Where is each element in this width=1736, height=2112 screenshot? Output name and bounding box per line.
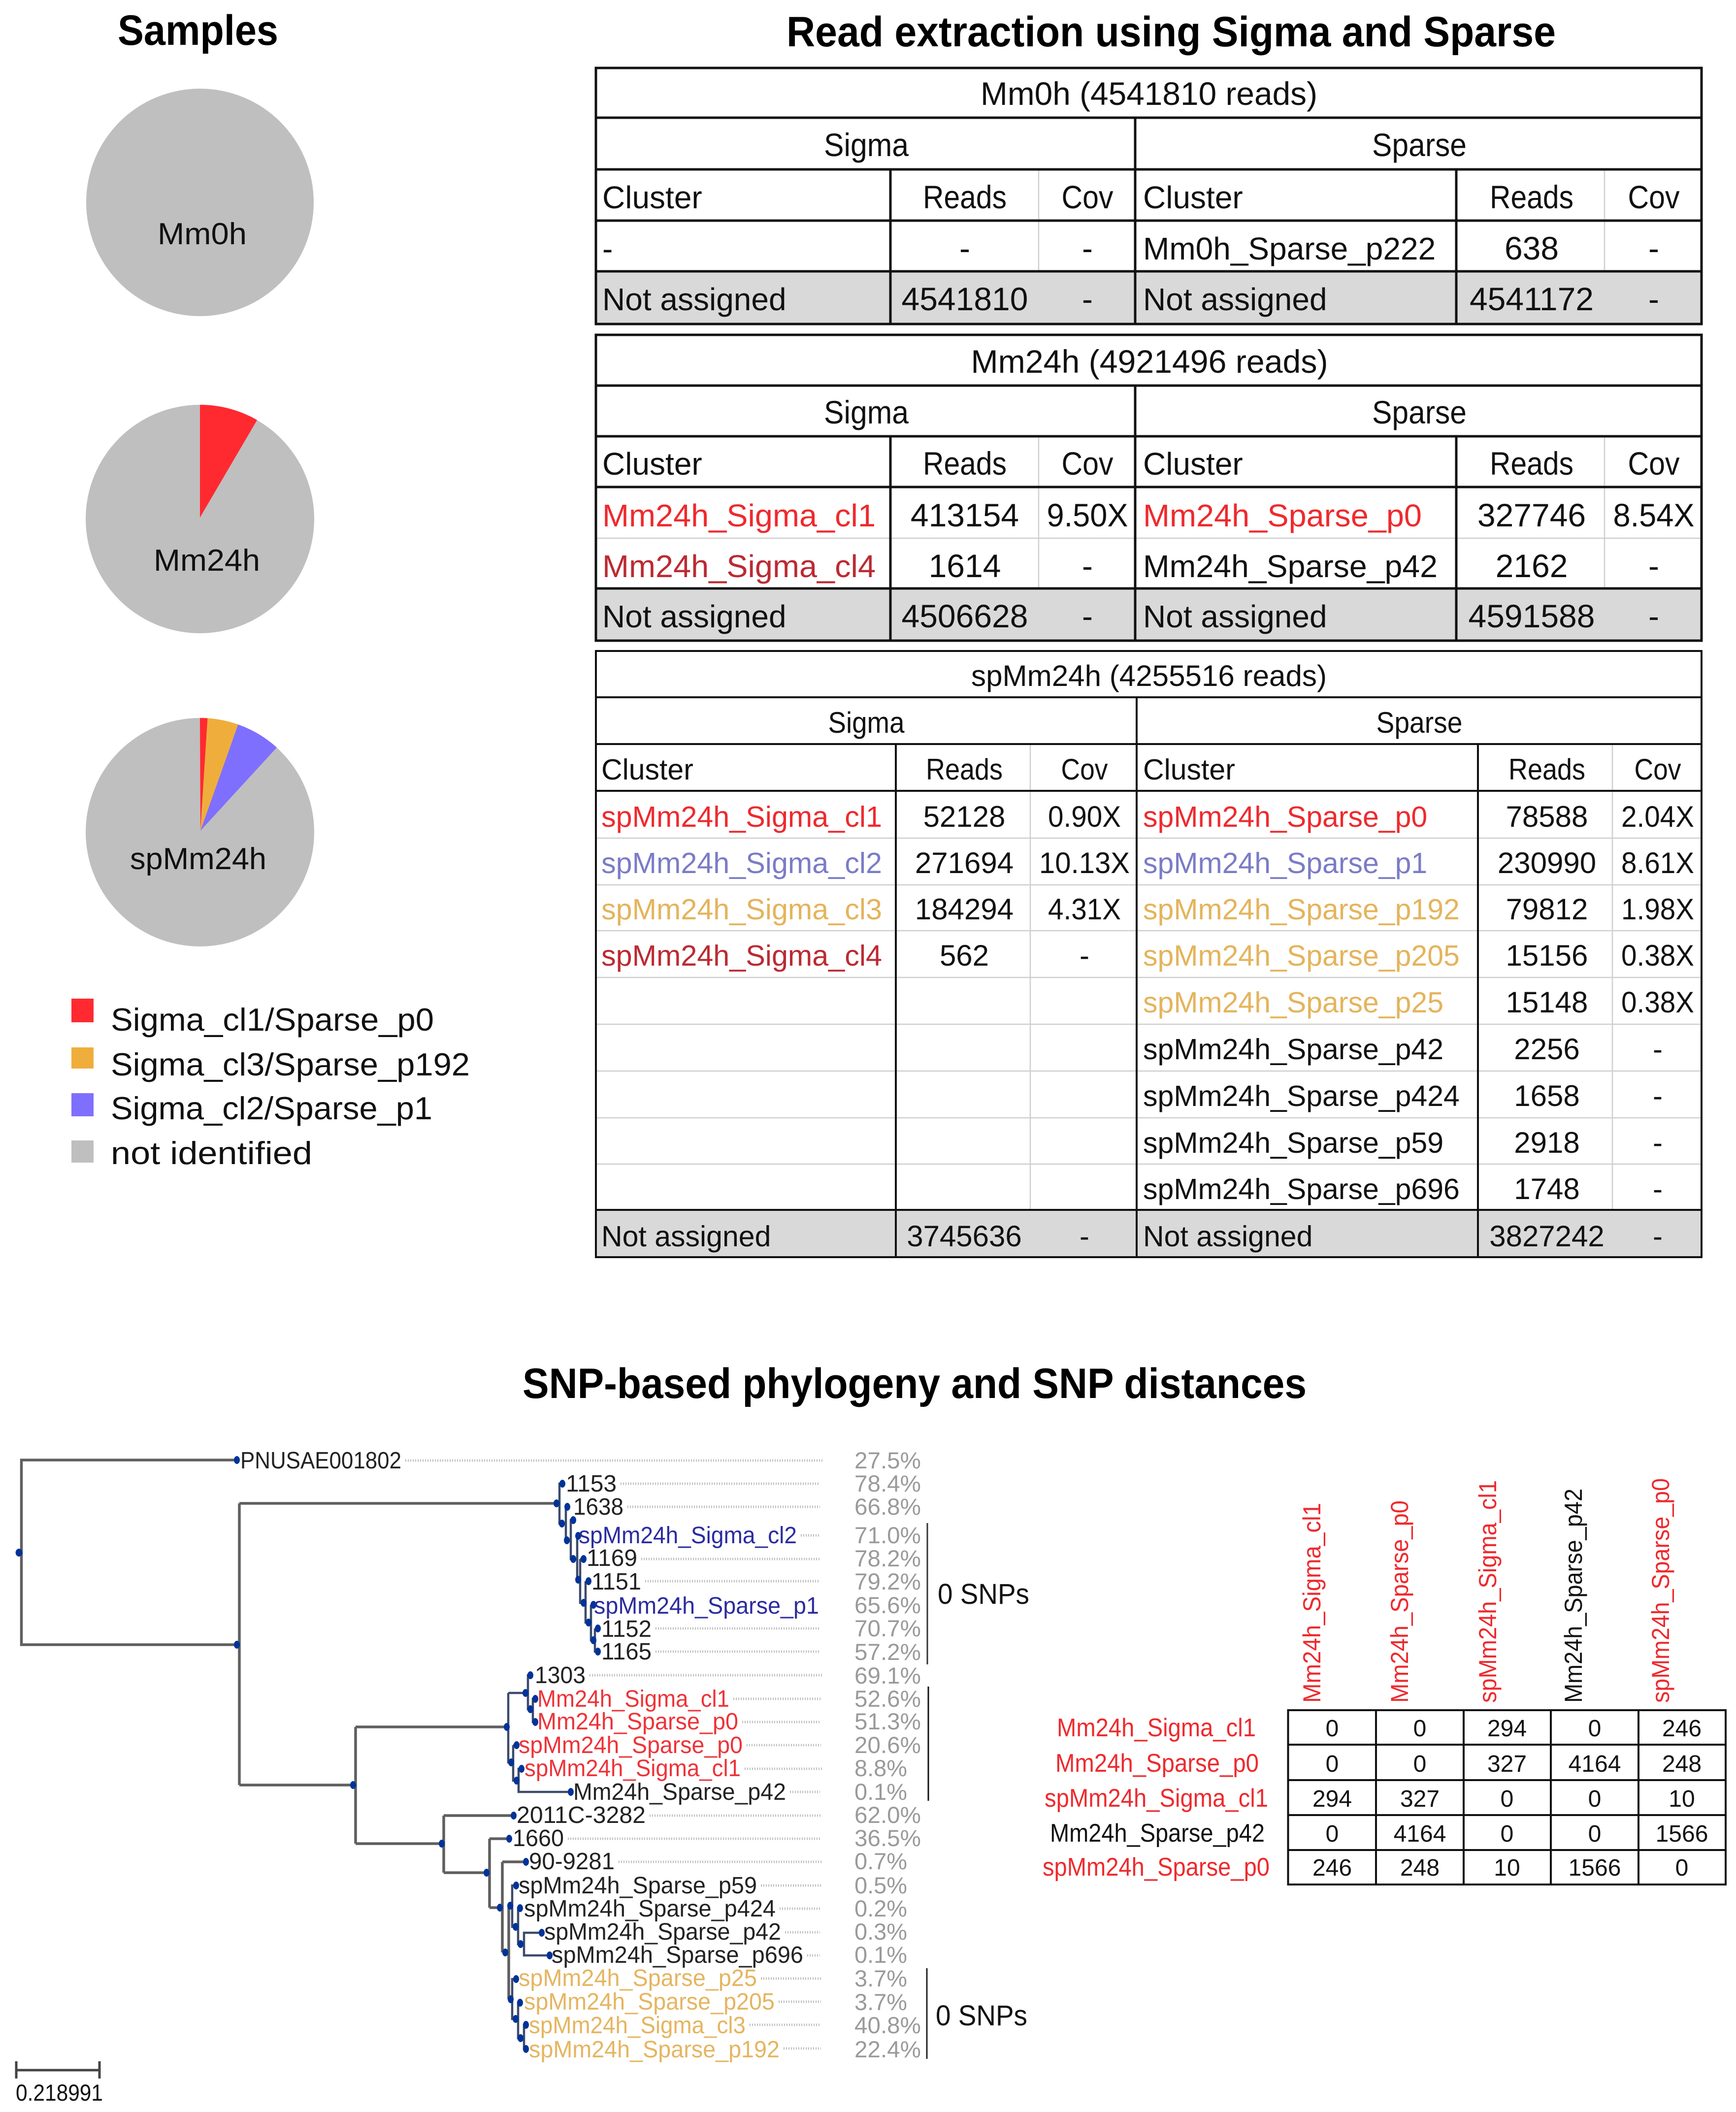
table: Mm0h reads: Mm0h (4541810 reads) — [981, 75, 1317, 112]
table: spMm24h reads: - — [1653, 1172, 1663, 1205]
column headers: Mm24h_Sparse_p0 — [1386, 1500, 1413, 1703]
table: Mm24h reads: Cov — [1062, 445, 1113, 482]
table: Mm0h reads: Cov — [1628, 179, 1679, 215]
table: Mm0h reads: - — [1648, 230, 1659, 266]
tip labels — [240, 1448, 819, 2063]
table: spMm24h reads: spMm24h_Sparse_p1 — [1143, 847, 1427, 879]
tip labels: 1153 — [566, 1471, 617, 1497]
table: Mm0h reads: 4541810 — [902, 281, 1028, 317]
table: spMm24h reads: 1748 — [1514, 1172, 1580, 1205]
table: Mm24h reads: 413154 — [911, 497, 1019, 533]
leader dots — [405, 1461, 822, 2048]
tip labels: 2011C-3282 — [517, 1802, 646, 1828]
table: spMm24h reads: - — [1653, 1220, 1663, 1253]
table: spMm24h reads: 2256 — [1514, 1033, 1580, 1066]
percentage column: 20.6% — [854, 1732, 921, 1758]
percentage column: 3.7% — [854, 1989, 907, 2015]
table: spMm24h reads — [596, 651, 1702, 1257]
table: Mm0h reads: Cluster — [602, 180, 702, 215]
percentage column: 0.1% — [854, 1779, 907, 1805]
heading: SNP-based phylogeny and SNP distances: SNP-based phylogeny and SNP distances — [523, 1360, 1307, 1407]
grid and values: 0 — [1413, 1751, 1426, 1777]
percentage column: 22.4% — [854, 2036, 921, 2062]
table: spMm24h reads: spMm24h_Sparse_p0 — [1143, 801, 1427, 833]
pie chart: spMm24h — [86, 718, 314, 946]
table: spMm24h reads: spMm24h_Sparse_p42 — [1143, 1033, 1443, 1066]
percentage column: 0.1% — [854, 1942, 907, 1968]
legend: Sigma_cl3/Sparse_p192 — [111, 1046, 470, 1082]
table: Mm0h reads: - — [1082, 230, 1093, 266]
table: spMm24h reads: Not assigned — [601, 1220, 771, 1253]
pie chart: spMm24h: spMm24h — [130, 842, 266, 876]
legend: Sigma_cl1/Sparse_p0 — [111, 1002, 434, 1038]
pie chart: Mm0h: Mm0h — [158, 217, 247, 251]
percentage column: 69.1% — [854, 1662, 921, 1689]
grid and values: 0 — [1326, 1751, 1339, 1777]
tip labels: Mm24h_Sparse_p42 — [573, 1779, 786, 1805]
table: Mm0h reads: Not assigned — [1143, 282, 1327, 317]
tip labels: PNUSAE001802 — [240, 1448, 401, 1474]
table: Mm24h reads: Cov — [1628, 445, 1679, 482]
table: Mm0h reads: Cluster — [1143, 180, 1243, 215]
grid and values: 0 — [1588, 1821, 1601, 1847]
percentage column — [854, 1447, 921, 2062]
table: spMm24h reads: 2918 — [1514, 1126, 1580, 1159]
legend: not identified — [111, 1135, 312, 1171]
table: Mm0h reads: Sparse — [1372, 127, 1467, 163]
table: Mm0h reads: Cov — [1062, 179, 1113, 215]
table: Mm24h reads: Sigma — [824, 394, 909, 430]
table: spMm24h reads: 1.98X — [1621, 893, 1694, 926]
table: Mm24h reads: 1614 — [929, 548, 1001, 584]
table: Mm24h reads: - — [1648, 548, 1659, 584]
table: Mm24h reads: Cluster — [1143, 446, 1243, 482]
pie chart: Mm0h — [86, 89, 314, 316]
tip labels: 1151 — [591, 1569, 641, 1595]
table: Mm24h reads: 327746 — [1477, 497, 1586, 533]
table: Mm24h reads: Cluster — [602, 446, 702, 482]
scale bar: 0.218991 — [16, 2080, 103, 2106]
table: spMm24h reads: 3827242 — [1489, 1220, 1605, 1253]
table: spMm24h reads: Sigma — [828, 706, 905, 739]
tip labels: spMm24h_Sparse_p1 — [594, 1593, 819, 1619]
percentage column: 8.8% — [854, 1755, 907, 1781]
table: Mm24h reads: - — [1648, 598, 1659, 634]
tip labels: 1303 — [535, 1662, 586, 1689]
table: Mm24h reads: - — [1082, 548, 1093, 584]
tree branches — [22, 1460, 598, 2049]
table: spMm24h reads: 10.13X — [1039, 846, 1130, 879]
tip labels: spMm24h_Sparse_p424 — [524, 1896, 776, 1922]
column headers: spMm24h_Sparse_p0 — [1647, 1478, 1674, 1703]
table: spMm24h reads: spMm24h_Sparse_p192 — [1143, 893, 1460, 926]
table: spMm24h reads: Not assigned — [1143, 1220, 1312, 1253]
table: spMm24h reads: - — [1653, 1079, 1663, 1112]
table: spMm24h reads: spMm24h_Sigma_cl4 — [601, 940, 882, 972]
table: spMm24h reads: 52128 — [923, 800, 1005, 833]
grid and values: 1566 — [1569, 1855, 1621, 1881]
percentage column: 65.6% — [854, 1592, 921, 1618]
tip labels: 1165 — [601, 1639, 652, 1665]
table: spMm24h reads: 0.90X — [1048, 800, 1121, 833]
row headers: spMm24h_Sigma_cl1 — [1045, 1784, 1268, 1813]
table: spMm24h reads: 0.38X — [1621, 939, 1694, 972]
table: Mm24h reads: 8.54X — [1613, 497, 1694, 533]
tip labels: spMm24h_Sparse_p205 — [524, 1989, 775, 2015]
table: spMm24h reads: 79812 — [1506, 893, 1588, 926]
table: spMm24h reads: 1658 — [1514, 1079, 1580, 1112]
grid and values: 294 — [1312, 1786, 1352, 1812]
grid and values: 246 — [1662, 1716, 1702, 1742]
percentage column: 0.2% — [854, 1895, 907, 1921]
percentage column: 3.7% — [854, 1965, 907, 1991]
table: Mm0h reads: Reads — [1490, 179, 1573, 215]
table: spMm24h reads: spMm24h_Sparse_p59 — [1143, 1127, 1443, 1159]
heading: Read extraction using Sigma and Sparse: Read extraction using Sigma and Sparse — [786, 8, 1556, 56]
percentage column: 78.2% — [854, 1545, 921, 1571]
legend — [71, 999, 470, 1171]
table: Mm24h reads: Mm24h_Sigma_cl4 — [602, 549, 876, 584]
percentage column: 36.5% — [854, 1825, 921, 1851]
table: spMm24h reads: spMm24h_Sparse_p25 — [1143, 986, 1443, 1019]
tree nodes — [16, 1456, 601, 2053]
percentage column: 78.4% — [854, 1470, 921, 1496]
row headers: Mm24h_Sparse_p0 — [1055, 1749, 1259, 1778]
percentage column: 62.0% — [854, 1802, 921, 1828]
tip labels: 1660 — [513, 1825, 564, 1852]
table: Mm24h reads: 2162 — [1496, 548, 1568, 584]
row headers: Mm24h_Sparse_p42 — [1050, 1819, 1265, 1848]
table: Mm0h reads: Reads — [923, 179, 1007, 215]
table: spMm24h reads: 562 — [940, 939, 989, 972]
table: spMm24h reads: - — [1653, 1033, 1663, 1066]
table: Mm24h reads: Mm24h_Sparse_p42 — [1143, 549, 1438, 584]
table: Mm24h reads: Sparse — [1372, 394, 1467, 430]
table: Mm24h reads: Mm24h_Sparse_p0 — [1143, 498, 1422, 533]
grid and values: 0 — [1413, 1716, 1426, 1742]
bracket: 0 SNPs lower: 0 SNPs — [936, 2000, 1027, 2032]
tip labels: 1169 — [587, 1545, 637, 1571]
table: Mm0h reads: - — [602, 231, 613, 266]
table: spMm24h reads: - — [1080, 1220, 1089, 1253]
grid and values: 10 — [1669, 1786, 1695, 1812]
percentage column: 27.5% — [854, 1447, 921, 1473]
bracket: red cluster — [928, 1687, 929, 1801]
pie chart: Mm24h — [86, 405, 314, 633]
tip labels: spMm24h_Sparse_p192 — [529, 2037, 780, 2063]
tip labels: spMm24h_Sparse_p25 — [519, 1965, 757, 1991]
table: spMm24h reads: Cov — [1634, 753, 1681, 786]
scale bar — [16, 2061, 103, 2106]
table: Mm24h reads: 4591588 — [1469, 598, 1595, 634]
table: spMm24h reads: 3745636 — [907, 1220, 1022, 1253]
table: Mm24h reads: 9.50X — [1047, 497, 1128, 533]
table: spMm24h reads: spMm24h_Sparse_p424 — [1143, 1080, 1460, 1112]
table: spMm24h reads: spMm24h_Sigma_cl3 — [601, 893, 882, 926]
percentage column: 79.2% — [854, 1568, 921, 1594]
grid and values: 327 — [1487, 1751, 1527, 1777]
table: spMm24h reads: Cov — [1061, 753, 1108, 786]
tip labels: spMm24h_Sigma_cl2 — [579, 1523, 797, 1549]
grid and values: 4164 — [1569, 1751, 1621, 1777]
table: spMm24h reads: 78588 — [1506, 800, 1588, 833]
table: Mm0h reads: Mm0h_Sparse_p222 — [1143, 231, 1436, 266]
pie chart: Mm24h: Mm24h — [154, 544, 260, 578]
percentage column: 0.7% — [854, 1848, 907, 1874]
table: Mm0h reads: - — [1082, 281, 1093, 317]
percentage column: 0.3% — [854, 1918, 907, 1945]
tip labels: spMm24h_Sparse_p696 — [552, 1942, 803, 1968]
table: spMm24h reads: spMm24h_Sparse_p205 — [1143, 940, 1460, 972]
table: Mm0h reads: Sigma — [824, 127, 909, 163]
column headers: spMm24h_Sigma_cl1 — [1474, 1480, 1502, 1703]
grid and values: 4164 — [1394, 1821, 1446, 1847]
row headers — [1043, 1714, 1270, 1882]
grid and values: 0 — [1326, 1716, 1339, 1742]
table: Mm24h reads: Not assigned — [602, 599, 786, 634]
table: Mm24h reads: Not assigned — [1143, 599, 1327, 634]
phylogenetic tree — [16, 1447, 921, 2063]
tip labels: spMm24h_Sparse_p59 — [519, 1873, 757, 1899]
table: Mm24h reads — [596, 335, 1702, 641]
grid and values: 0 — [1588, 1786, 1601, 1812]
table: spMm24h reads: 230990 — [1498, 846, 1596, 879]
percentage column: 40.8% — [854, 2012, 921, 2038]
table: spMm24h reads: 184294 — [915, 893, 1014, 926]
table: spMm24h reads: 0.38X — [1621, 986, 1694, 1019]
column headers: Mm24h_Sparse_p42 — [1560, 1489, 1587, 1703]
table: Mm0h reads: - — [959, 230, 970, 266]
percentage column: 52.6% — [854, 1686, 921, 1712]
table: Mm24h reads: Mm24h (4921496 reads) — [971, 343, 1328, 380]
table: spMm24h reads: 271694 — [915, 846, 1014, 879]
table: Mm24h reads: 4506628 — [902, 598, 1028, 634]
grid and values: 327 — [1400, 1786, 1440, 1812]
grid and values: 0 — [1501, 1821, 1513, 1847]
table: Mm24h reads: - — [1082, 598, 1093, 634]
percentage column: 70.7% — [854, 1615, 921, 1641]
table: spMm24h reads: spMm24h_Sparse_p696 — [1143, 1173, 1460, 1205]
row headers: Mm24h_Sigma_cl1 — [1057, 1714, 1256, 1742]
column headers: Mm24h_Sigma_cl1 — [1298, 1503, 1326, 1703]
table: spMm24h reads: 8.61X — [1621, 846, 1694, 879]
grid and values: 0 — [1675, 1855, 1688, 1881]
grid and values: 246 — [1312, 1855, 1352, 1881]
column headers — [1298, 1478, 1674, 1703]
table: Mm24h reads: Mm24h_Sigma_cl1 — [602, 498, 876, 533]
table: Mm0h reads: - — [1648, 281, 1659, 317]
table: spMm24h reads: Cluster — [1143, 753, 1235, 786]
table: spMm24h reads: Reads — [1508, 753, 1585, 786]
grid and values: 10 — [1494, 1855, 1520, 1881]
tip labels: 1638 — [573, 1494, 623, 1520]
grid and values: 0 — [1588, 1716, 1601, 1742]
table: spMm24h reads: 4.31X — [1048, 893, 1121, 926]
percentage column: 57.2% — [854, 1639, 921, 1665]
percentage column: 66.8% — [854, 1494, 921, 1520]
grid and values: 294 — [1487, 1716, 1527, 1742]
table: spMm24h reads: spMm24h (4255516 reads) — [971, 659, 1327, 692]
table: spMm24h reads: 15156 — [1506, 939, 1588, 972]
tip labels: 90-9281 — [529, 1849, 615, 1875]
table: Mm0h reads: 638 — [1505, 230, 1559, 266]
table: spMm24h reads: - — [1080, 939, 1089, 972]
table: Mm0h reads: 4541172 — [1470, 281, 1594, 317]
table: Mm0h reads: Not assigned — [602, 282, 786, 317]
tip labels: spMm24h_Sparse_p0 — [519, 1732, 743, 1758]
grid and values: 0 — [1326, 1821, 1339, 1847]
table: spMm24h reads: Cluster — [601, 753, 693, 786]
grid and values: 248 — [1400, 1855, 1440, 1881]
table: spMm24h reads: spMm24h_Sigma_cl1 — [601, 801, 882, 833]
tip labels: spMm24h_Sigma_cl1 — [524, 1755, 741, 1782]
grid and values: 1566 — [1656, 1821, 1708, 1847]
table: Mm24h reads: Reads — [1490, 445, 1573, 482]
percentage column: 71.0% — [854, 1522, 921, 1548]
legend: Sigma_cl2/Sparse_p1 — [111, 1090, 432, 1126]
tip labels: Mm24h_Sparse_p0 — [537, 1709, 738, 1735]
table: spMm24h reads: Reads — [926, 753, 1003, 786]
grid and values: 0 — [1501, 1786, 1513, 1812]
table: spMm24h reads: 2.04X — [1621, 800, 1694, 833]
table: spMm24h reads: spMm24h_Sigma_cl2 — [601, 847, 882, 879]
table: spMm24h reads: - — [1653, 1126, 1663, 1159]
grid and values — [1288, 1710, 1726, 1885]
table: spMm24h reads: 15148 — [1506, 986, 1588, 1019]
SNP distance matrix — [1043, 1478, 1726, 1885]
percentage column: 0.5% — [854, 1872, 907, 1898]
tip labels: Mm24h_Sigma_cl1 — [537, 1686, 729, 1712]
tip labels: 1152 — [601, 1616, 652, 1642]
heading: Samples: Samples — [118, 7, 278, 54]
row headers: spMm24h_Sparse_p0 — [1043, 1853, 1270, 1882]
grid and values: 248 — [1662, 1751, 1702, 1777]
tip labels: spMm24h_Sparse_p42 — [544, 1919, 781, 1945]
table: Mm24h reads: Reads — [923, 445, 1007, 482]
tip labels: spMm24h_Sigma_cl3 — [529, 2013, 746, 2039]
table: Mm0h reads — [596, 68, 1702, 324]
table: spMm24h reads: Sparse — [1376, 706, 1463, 739]
bracket: 0 SNPs upper: 0 SNPs — [938, 1578, 1029, 1610]
percentage column: 51.3% — [854, 1708, 921, 1734]
